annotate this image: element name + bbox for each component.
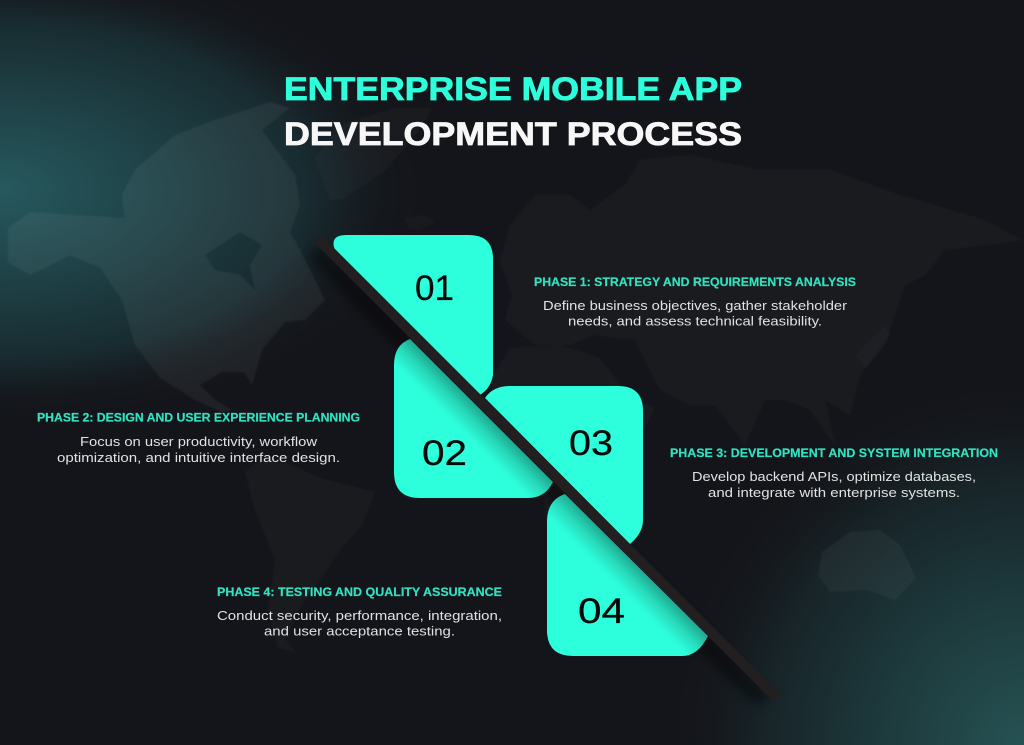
Eurasia bbox=[500, 155, 1022, 445]
phase 2 text: PHASE 2: DESIGN AND USER EXPERIENCE PLANNING bbox=[37, 410, 360, 424]
phase 2 text bbox=[37, 410, 360, 465]
line shadow bbox=[308, 245, 770, 708]
title: ENTERPRISE MOBILE APP bbox=[284, 71, 742, 107]
card 01: 01 bbox=[415, 269, 454, 308]
card 01 bbox=[334, 235, 493, 395]
phase 2 text: Focus on user productivity, workflow bbox=[80, 434, 318, 449]
card 02 bbox=[394, 339, 553, 498]
phase 3 text: and integrate with enterprise systems. bbox=[708, 485, 960, 500]
phase 3 text: Develop backend APIs, optimize databases, bbox=[692, 469, 976, 484]
phase 1 text: needs, and assess technical feasibility. bbox=[568, 314, 822, 328]
phase 4 text: PHASE 4: TESTING AND QUALITY ASSURANCE bbox=[217, 585, 502, 599]
card 04 bbox=[547, 494, 708, 656]
Africa bbox=[490, 345, 655, 590]
phase 3 text bbox=[670, 446, 998, 500]
phase 1 text: Define business objectives, gather stakeholder bbox=[543, 298, 848, 313]
Australia bbox=[818, 530, 916, 600]
phase 1 text bbox=[534, 275, 856, 328]
phase 1 text: PHASE 1: STRATEGY AND REQUIREMENTS ANALYSIS bbox=[534, 275, 856, 289]
card 03: 03 bbox=[569, 424, 613, 463]
title: DEVELOPMENT PROCESS bbox=[284, 116, 742, 152]
Iceland bbox=[405, 215, 435, 230]
phase 4 text: and user acceptance testing. bbox=[264, 624, 455, 638]
phase 3 text: PHASE 3: DEVELOPMENT AND SYSTEM INTEGRATION bbox=[670, 446, 998, 460]
diagonal divider line bbox=[314, 234, 781, 701]
world map silhouette bbox=[8, 102, 1022, 652]
title bbox=[284, 71, 742, 152]
card 02: 02 bbox=[422, 434, 467, 473]
South America bbox=[245, 458, 375, 652]
card 03 bbox=[485, 386, 643, 544]
North America bbox=[8, 102, 325, 412]
phase 4 text bbox=[217, 585, 502, 638]
Greenland bbox=[315, 108, 432, 200]
phase 2 text: optimization, and intuitive interface design. bbox=[57, 450, 340, 465]
phase 4 text: Conduct security, performance, integration, bbox=[217, 608, 502, 623]
Japan bbox=[855, 325, 890, 368]
card 04: 04 bbox=[578, 592, 625, 631]
